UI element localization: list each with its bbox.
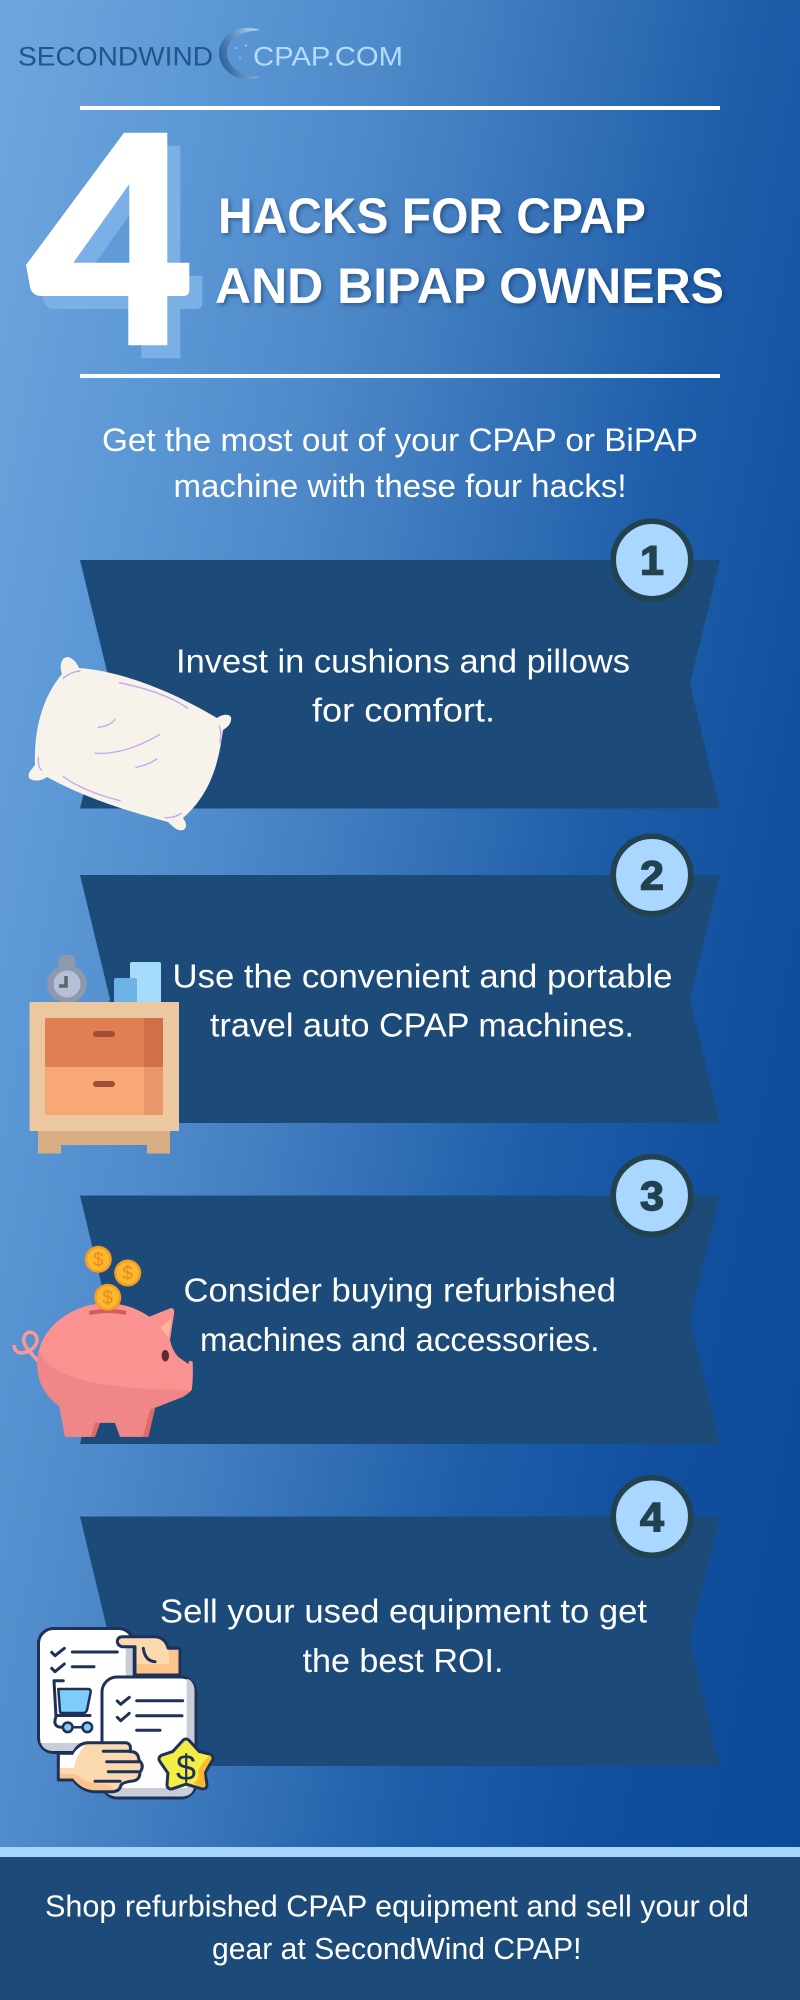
panel: hack 4 [38,1478,720,1798]
banner 1 [80,560,720,808]
intro text [102,422,698,504]
icon: piggy bank with coins: $ [93,1250,104,1271]
hack 2 text: travel auto CPAP machines. [210,1006,634,1044]
hack 3 text: machines and accessories. [200,1321,600,1358]
badge 2: 2 [640,852,664,898]
badge 3: 3 [640,1173,664,1219]
hack 1 text: for comfort. [312,692,495,728]
header bottom rule [80,374,720,378]
banner 3 [80,1196,720,1444]
badge 3 [613,1157,691,1234]
intro text: machine with these four hacks! [174,468,626,504]
footer panel [0,1857,800,2000]
footer panel: Shop refurbished CPAP equipment and sell your old [45,1888,749,1924]
badge 4: 4 [640,1494,665,1540]
banner 2 [80,875,720,1123]
logo: SecondWind CPAP.com: SECONDWIND [18,42,213,72]
panel: hack 3 [14,1157,720,1444]
logo: SecondWind CPAP.com: CPAP.COM [253,42,403,72]
panel: hack 2 [30,836,720,1154]
badge 1 [613,521,691,599]
hack 1 text: Invest in cushions and pillows [176,642,630,680]
title [215,188,724,314]
icon: documents, cart, hands and dollar star: $ [176,1747,196,1788]
hack 4 text [160,1592,647,1679]
hack 2 text [172,958,672,1044]
hack 4 text: Sell your used equipment to get [160,1592,647,1630]
footer divider strip [0,1847,800,1857]
icon: piggy bank with coins: $ [102,1288,113,1309]
icon: piggy bank with coins [14,1246,193,1437]
title: AND BIPAP OWNERS [215,258,724,314]
hack 3 text: Consider buying refurbished [184,1272,616,1308]
big numeral 4 [26,133,202,358]
icon: piggy bank with coins: $ [122,1264,133,1285]
icon: nightstand with clock and books [30,955,179,1154]
logo: SecondWind CPAP.com [18,28,403,79]
header top rule [80,106,720,110]
badge 4 [613,1478,691,1555]
icon: pillow [29,657,231,830]
badge 2 [613,836,691,914]
badge 1: 1 [640,537,664,583]
hack 4 text: the best ROI. [302,1642,504,1679]
hack 2 text: Use the convenient and portable [172,958,672,994]
title: HACKS FOR CPAP [218,188,646,244]
footer panel: gear at SecondWind CPAP! [212,1931,582,1966]
banner 4 [80,1516,720,1766]
intro text: Get the most out of your CPAP or BiPAP [102,422,698,458]
hack 3 text [184,1272,616,1358]
hack 1 text [176,642,630,728]
icon: documents, cart, hands and dollar star [38,1628,211,1798]
panel: hack 1 [29,521,720,830]
